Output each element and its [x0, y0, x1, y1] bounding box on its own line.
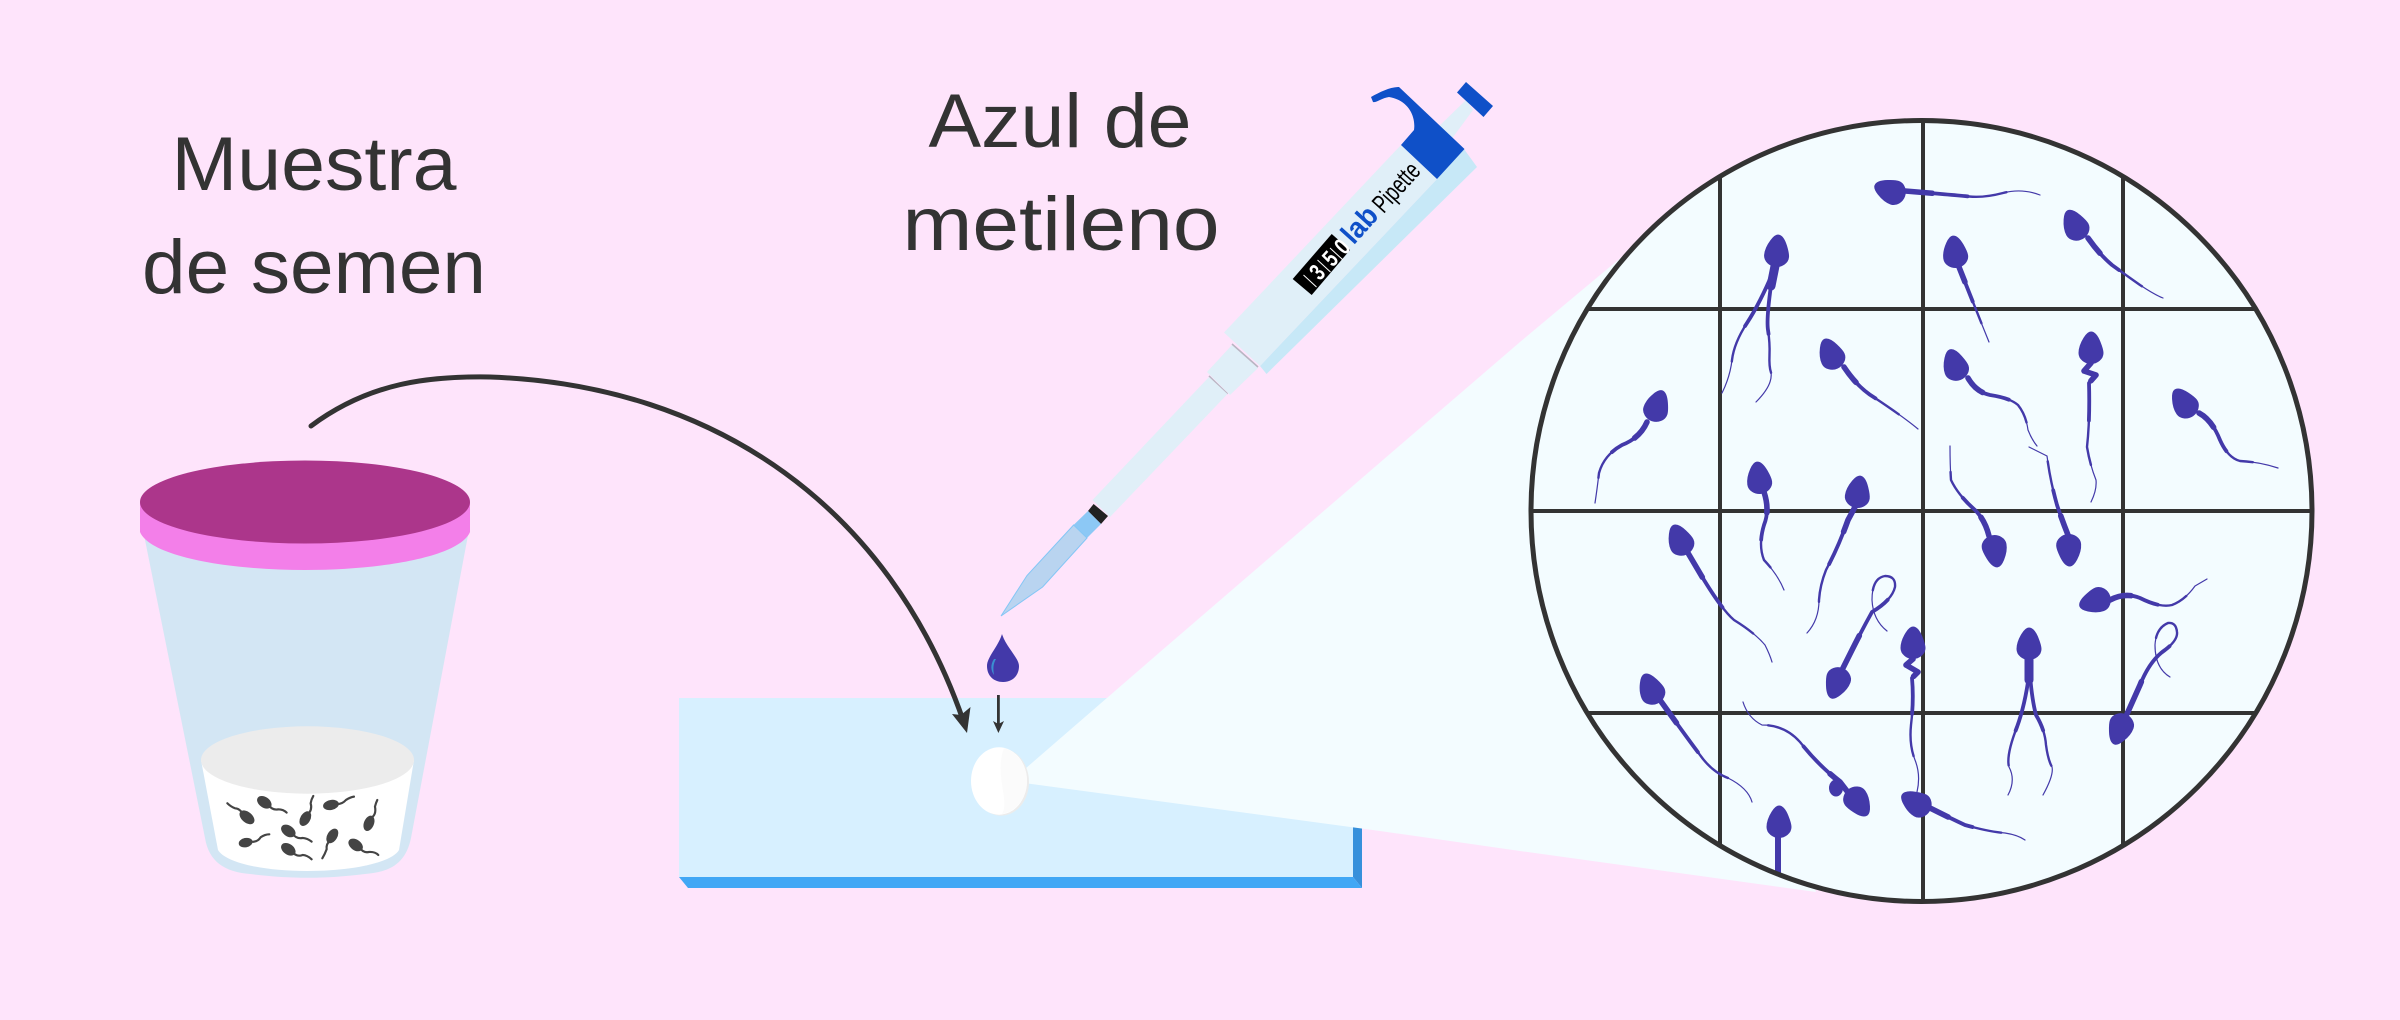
- sperm J: [1745, 460, 1784, 590]
- magnification cone: [1018, 250, 1816, 892]
- pipette: [1001, 82, 1493, 616]
- sperm Q: two tails: [2008, 628, 2052, 795]
- counting grid: [1520, 110, 2320, 910]
- heading: Azul de metileno: [902, 79, 1220, 267]
- volume display: 0: [1329, 234, 1356, 260]
- pipette blue head: [1371, 87, 1464, 179]
- cup body: [143, 530, 469, 878]
- sperm D: [2057, 205, 2163, 298]
- sperm T: [1633, 669, 1752, 802]
- sperm L: [1950, 446, 2010, 569]
- curved arrow: sample to slide: [311, 377, 970, 733]
- sperm H: kinked neck: [2079, 332, 2103, 502]
- pipette collar: [1207, 345, 1258, 395]
- sample surface: [201, 726, 414, 794]
- brand: Pipette: Pipette: [1366, 156, 1426, 218]
- semen sample liquid: [201, 760, 414, 871]
- microscope field of view: [1520, 110, 2320, 910]
- sperm E: [1595, 387, 1673, 503]
- sperm R: [2076, 579, 2207, 618]
- volume display: [1293, 234, 1356, 295]
- sperm N: [1662, 520, 1772, 662]
- icon: methylene blue drop: [987, 634, 1019, 682]
- sperm U: double head: [1743, 702, 1877, 822]
- heading: Azul de metileno: Azul de: [928, 79, 1192, 164]
- arrow: drop to slide: [993, 695, 1004, 733]
- sperm V: [1896, 785, 2025, 840]
- cup lid band: [140, 502, 470, 570]
- sperm G: [1938, 346, 2037, 446]
- plunger stem: [1430, 100, 1473, 148]
- heading: Muestra de semen: de semen: [142, 225, 486, 310]
- cup lid top: [140, 460, 470, 544]
- sperm M: [2029, 447, 2082, 567]
- sperm I: [2165, 383, 2278, 468]
- sperm C: [1941, 234, 1989, 342]
- pipette side strip: [1260, 149, 1477, 374]
- pipette body: [1224, 145, 1437, 366]
- brand: lab: lab: [1335, 200, 1385, 250]
- disposable tip: [1001, 525, 1087, 616]
- tip collar: [1074, 511, 1101, 538]
- heading: Muestra de semen: Muestra: [172, 122, 457, 207]
- field outline: [1531, 120, 2312, 902]
- sperm S: looped tail: [2103, 623, 2177, 748]
- sperm F: [1813, 334, 1918, 429]
- volume display: 3: [1304, 260, 1331, 285]
- sperm A: [1871, 174, 2040, 208]
- sperm K: [1807, 474, 1872, 633]
- pipette shaft: [1092, 377, 1228, 517]
- heading: Azul de metileno: metileno: [902, 182, 1220, 267]
- slide top: [679, 698, 1353, 877]
- slide right edge: [1353, 698, 1362, 888]
- field background: [1532, 121, 2312, 901]
- plunger button: [1457, 82, 1493, 117]
- volume display: 5: [1317, 246, 1344, 272]
- sperm B: two tails: [1722, 234, 1790, 402]
- sperm in cup: [227, 793, 378, 859]
- sperm P: kinked neck: [1901, 627, 1925, 792]
- black band: [1088, 504, 1108, 524]
- slide bottom edge: [679, 877, 1362, 888]
- sperm O: looped tail: [1820, 576, 1895, 702]
- sperm W: [1767, 806, 1791, 873]
- sample spot on slide: [971, 747, 1029, 816]
- microscope slide: [679, 698, 1362, 888]
- semen sample cup: [140, 460, 470, 878]
- heading: Muestra de semen: [142, 122, 486, 310]
